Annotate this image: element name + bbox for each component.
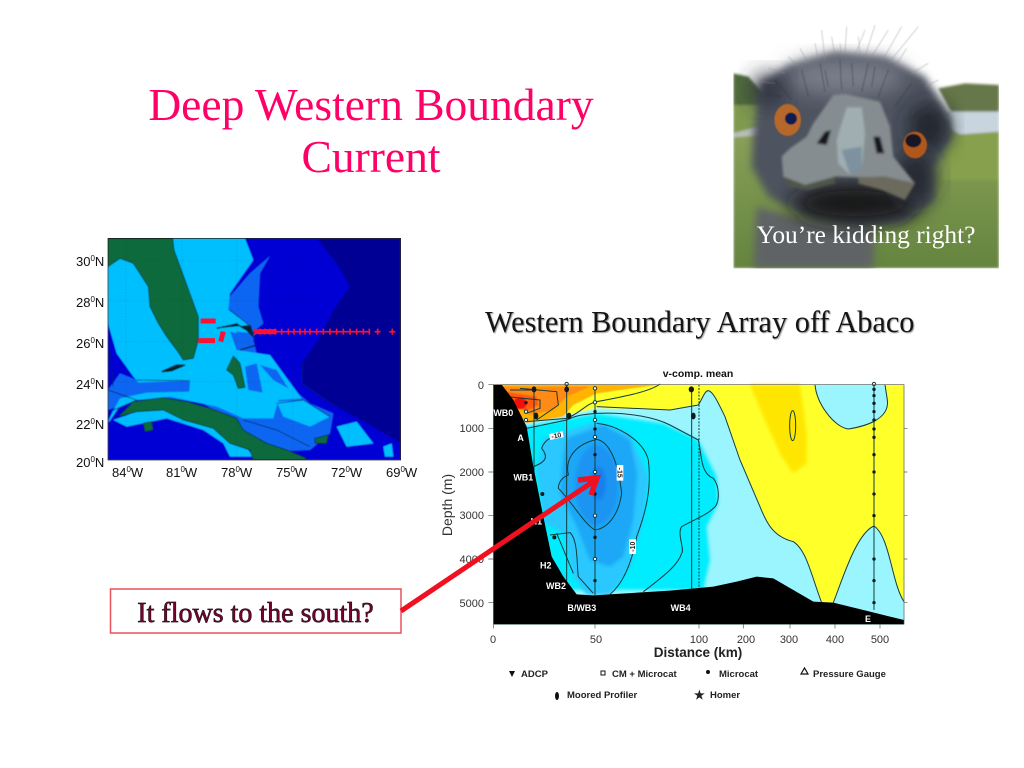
title: Current	[302, 131, 441, 182]
map axis labels: 30	[76, 254, 90, 269]
depth axis labels: 0	[478, 380, 484, 392]
distance axis labels: 300	[780, 634, 798, 646]
legend: Homer	[710, 690, 740, 701]
arrow	[401, 478, 597, 611]
map axis labels: N	[95, 417, 104, 432]
map axis labels: W	[350, 465, 363, 480]
map axis labels: 0	[180, 465, 185, 474]
map axis labels: 0	[90, 417, 95, 426]
map axis labels: 0	[126, 465, 131, 474]
map axis labels: 24	[76, 377, 90, 392]
depth axis title: Depth (m)	[439, 474, 455, 536]
section plot: A	[517, 433, 524, 443]
shallow water	[108, 238, 302, 422]
map axis labels: N	[95, 336, 104, 351]
legend: CM + Microcat	[612, 669, 678, 680]
section plot: -10	[551, 432, 562, 441]
shelf banks	[108, 256, 333, 452]
distance axis labels: 100	[690, 634, 708, 646]
map axis labels: W	[295, 465, 308, 480]
depth axis labels: 2000	[460, 467, 484, 479]
legend: ADCP	[521, 669, 549, 680]
map axis labels: 0	[290, 465, 295, 474]
map axis labels: 0	[345, 465, 350, 474]
depth axis labels: 4000	[460, 554, 484, 566]
top wisps	[758, 25, 938, 87]
distance axis labels: 50	[590, 634, 602, 646]
map axis labels: 72	[331, 465, 345, 480]
distance axis labels: 400	[826, 634, 844, 646]
section plot: H2	[540, 561, 551, 571]
map axis labels: 0	[90, 336, 95, 345]
distance axis labels	[490, 634, 889, 646]
legend	[509, 668, 886, 702]
map axis labels: 0	[400, 465, 405, 474]
land: Florida, Cuba, Andros, Hispaniola	[108, 238, 198, 360]
depth axis labels: 1000	[460, 423, 484, 435]
legend: Microcat	[719, 669, 759, 680]
depth axis labels	[460, 380, 484, 610]
panel: bathymetric map	[76, 238, 418, 480]
map axis labels: 84	[112, 465, 126, 480]
map axis labels: 81	[166, 465, 180, 480]
neck	[753, 207, 875, 268]
mooring crosses	[255, 329, 369, 334]
distance axis labels: 0	[490, 634, 496, 646]
section plot: B/WB3	[567, 603, 596, 613]
section plot: -15	[616, 468, 623, 478]
section plot: WB0	[493, 408, 513, 418]
map axis labels: N	[95, 455, 104, 470]
map axis labels: N	[95, 295, 104, 310]
section plot	[488, 382, 907, 628]
section plot: WB4	[671, 603, 691, 613]
section plot: WB1	[513, 472, 533, 482]
map axis labels: 0	[90, 455, 95, 464]
depth axis labels: 5000	[460, 598, 484, 610]
heading: array: Western Boundary Array off Abaco	[485, 305, 914, 339]
caption: You’re kidding right?	[757, 221, 975, 249]
distance axis labels: 200	[737, 634, 755, 646]
map axis labels	[76, 254, 418, 480]
map axis labels: 0	[235, 465, 240, 474]
distance axis labels: 500	[871, 634, 889, 646]
section plot: H1	[531, 517, 542, 527]
section plot: WB2	[546, 581, 566, 591]
map axis labels: W	[185, 465, 198, 480]
map axis labels: N	[95, 254, 104, 269]
map axis labels: 20	[76, 455, 90, 470]
map axis labels: 22	[76, 417, 90, 432]
callout	[110, 589, 401, 633]
map axis labels: 26	[76, 336, 90, 351]
distance axis title: Distance (km)	[654, 645, 742, 660]
contours and moorings	[507, 384, 904, 610]
map axis labels: 28	[76, 295, 90, 310]
map axis labels: 75	[276, 465, 290, 480]
map axis labels: W	[240, 465, 253, 480]
mooring markers	[524, 386, 876, 604]
depth axis labels: 3000	[460, 510, 484, 522]
map axis labels: 0	[90, 254, 95, 263]
eyes	[774, 104, 927, 158]
map axis labels: 78	[221, 465, 235, 480]
section plot: -10	[630, 542, 637, 552]
callout: It flows to the south?	[137, 598, 374, 629]
panel: velocity section chart	[439, 368, 907, 702]
map axis labels: 0	[90, 295, 95, 304]
legend: Moored Profiler	[567, 690, 638, 701]
map axis labels: W	[131, 465, 144, 480]
map axis labels: W	[405, 465, 418, 480]
head feathers	[752, 52, 953, 228]
title: Deep Western Boundary	[148, 79, 594, 130]
chart subtitle: v-comp. mean	[663, 368, 733, 380]
title	[148, 79, 594, 182]
map axis labels: 0	[90, 377, 95, 386]
legend: ★	[694, 688, 705, 702]
section plot: E	[865, 614, 871, 624]
beak	[782, 94, 915, 200]
map axis labels: N	[95, 377, 104, 392]
map axis labels: 69	[386, 465, 400, 480]
panel: emu photo	[733, 25, 999, 268]
axis ticks	[488, 385, 907, 628]
legend: Pressure Gauge	[813, 669, 886, 680]
